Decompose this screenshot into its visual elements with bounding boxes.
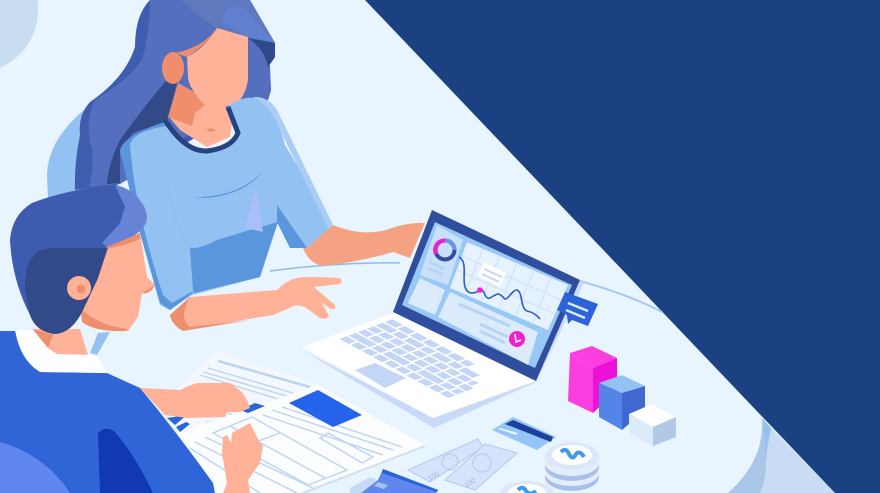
chart marker xyxy=(477,287,483,293)
collar xyxy=(15,330,107,373)
man xyxy=(0,184,263,493)
top-left background circle xyxy=(0,0,38,73)
screen xyxy=(402,222,572,368)
chart grid xyxy=(457,249,561,323)
speech bubble xyxy=(557,292,598,326)
sleeve fold xyxy=(98,429,153,493)
neck xyxy=(33,329,97,365)
shirt xyxy=(120,98,333,310)
blue block xyxy=(289,390,362,427)
documents xyxy=(165,351,425,493)
hair xyxy=(10,184,130,334)
shirt collar xyxy=(165,107,238,151)
neck xyxy=(170,83,232,147)
chair back xyxy=(47,110,90,200)
main sheet xyxy=(177,385,425,493)
panel: chart area xyxy=(450,242,568,330)
panel: top left xyxy=(420,225,463,285)
laptop shadow band xyxy=(302,282,584,428)
upper sheet xyxy=(165,351,320,435)
badge xyxy=(509,331,525,347)
arm reaching to laptop xyxy=(303,223,425,266)
table edge and shadow xyxy=(270,263,835,493)
donut chart xyxy=(435,240,454,260)
panel: lower xyxy=(438,292,538,365)
blue tabs xyxy=(167,403,265,432)
shoulder highlight xyxy=(0,442,70,493)
hair xyxy=(75,0,275,190)
white cube xyxy=(629,404,676,427)
calculator xyxy=(350,469,438,493)
sweater xyxy=(0,331,215,493)
credit card xyxy=(492,417,556,450)
arm pointing xyxy=(170,277,342,330)
second hand xyxy=(222,423,263,493)
trackpad xyxy=(355,363,406,388)
chair sliver xyxy=(90,332,110,355)
second coin xyxy=(500,481,554,493)
keyboard xyxy=(343,321,497,397)
face xyxy=(187,28,248,107)
banknotes xyxy=(408,439,517,490)
panel: bottom left xyxy=(408,278,445,315)
blue cube xyxy=(599,375,645,393)
placeholder text bars xyxy=(428,262,510,343)
hand on paper xyxy=(140,383,250,418)
face xyxy=(80,233,155,331)
main sheet lines xyxy=(190,407,402,493)
dark navy diagonal panel xyxy=(365,0,880,493)
line chart xyxy=(459,257,540,319)
screen frame xyxy=(393,210,580,381)
upper sheet lines xyxy=(198,361,310,431)
banknote labels: 100 xyxy=(463,478,477,490)
laptop base xyxy=(302,312,536,418)
chart tooltip xyxy=(478,262,506,287)
coin stack xyxy=(545,442,599,491)
banknote labels: 100 xyxy=(427,471,441,483)
cube chart xyxy=(568,346,676,446)
banknote labels xyxy=(427,471,477,490)
laptop xyxy=(302,210,598,428)
pink cube xyxy=(570,346,617,368)
ear xyxy=(162,52,184,84)
woman xyxy=(47,0,425,331)
ear xyxy=(67,276,91,300)
